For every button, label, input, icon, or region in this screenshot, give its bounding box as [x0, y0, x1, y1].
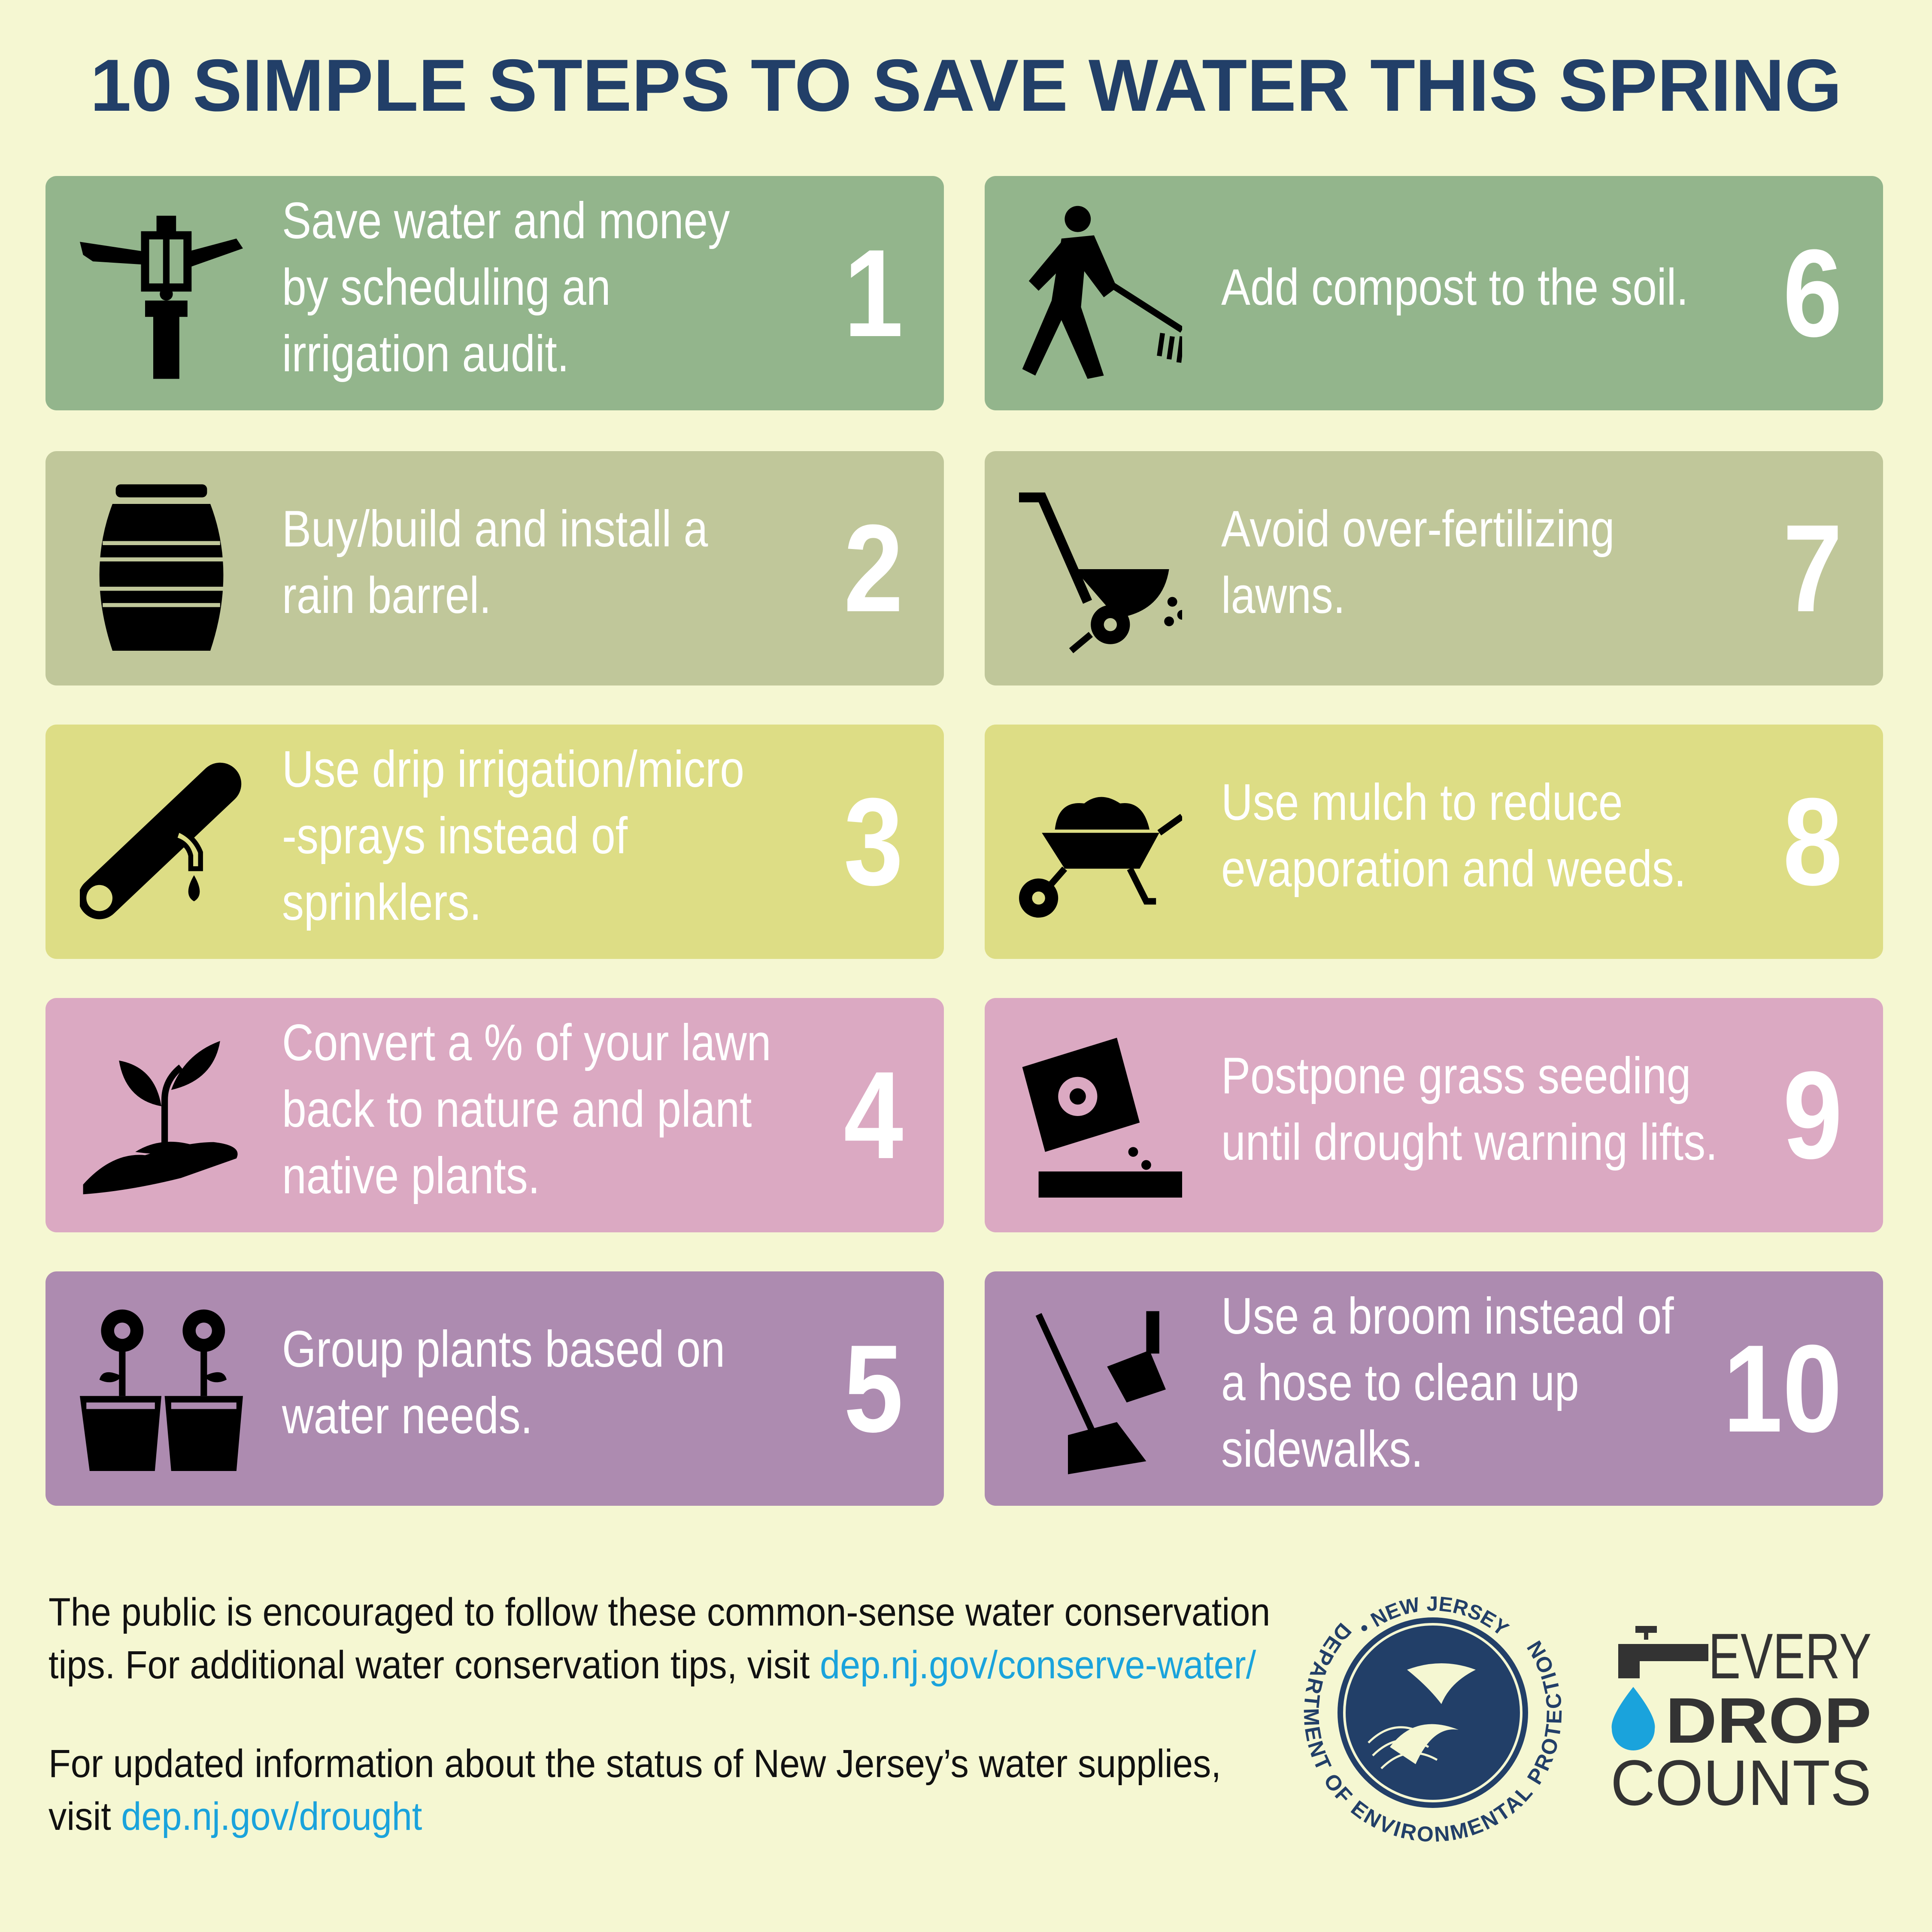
icon: hand with plant [80, 1024, 243, 1208]
text [282, 992, 866, 1226]
text [282, 170, 866, 404]
text: Add compost to the soil. [1221, 258, 1689, 316]
text [1221, 719, 1805, 953]
footer text 1: The public is encouraged to follow these common-sense water conservation [49, 1590, 1270, 1634]
number: 1 [843, 223, 903, 362]
text [282, 719, 866, 953]
text: irrigation audit. [282, 325, 569, 382]
text [1221, 1265, 1805, 1500]
footer text 1 [49, 1586, 1270, 1692]
number: 2 [843, 499, 903, 638]
text [1221, 992, 1805, 1226]
logo: NJ DEP seal [1283, 1562, 1583, 1863]
text: Group plants based on [282, 1320, 725, 1378]
logo: Every Drop Counts [1610, 1618, 1876, 1816]
panel: step 2 [45, 451, 944, 685]
text [282, 1265, 866, 1500]
text: Convert a % of your lawn [282, 1014, 771, 1071]
icon: potted flowers [80, 1297, 243, 1482]
icon: wheelbarrow [1019, 750, 1182, 935]
icon: drop [1612, 1687, 1655, 1750]
text: rain barrel. [282, 567, 491, 624]
icon: sprinkler [80, 202, 243, 386]
footer text 1: tips. For additional water conservation tips, visit dep.nj.gov/conserve-water/ [49, 1643, 1256, 1687]
number: 9 [1783, 1046, 1842, 1185]
panel: step 1 [45, 176, 944, 410]
text: back to nature and plant [282, 1080, 752, 1137]
icon: faucet [1618, 1626, 1708, 1678]
footer text 2: visit dep.nj.gov/drought [49, 1795, 422, 1838]
panel: step 4 [45, 998, 944, 1232]
logo: NJ DEP seal: DEPARTMENT OF ENVIRONMENTAL PROTECTION [1299, 1618, 1566, 1847]
icon: drip pipe [80, 750, 243, 935]
icon: rain barrel [80, 477, 243, 661]
panel: step 8 [985, 725, 1883, 959]
panel: step 10 [985, 1271, 1883, 1506]
panel: step 7 [985, 451, 1883, 685]
text: lawns. [1221, 567, 1345, 624]
icon: broom and dustpan [1019, 1297, 1182, 1482]
panel: step 3 [45, 725, 944, 959]
number: 4 [843, 1046, 903, 1185]
text: -sprays instead of [282, 807, 628, 864]
text: sidewalks. [1221, 1420, 1423, 1477]
number: 10 [1723, 1319, 1842, 1458]
icon: seed packet [1019, 1024, 1182, 1208]
panel: step 9 [985, 998, 1883, 1232]
text: Avoid over-fertilizing [1221, 500, 1615, 558]
icon: spreader [1019, 477, 1182, 661]
footer text 2: For updated information about the status of New Jersey’s water supplies, [49, 1742, 1221, 1786]
panel: step 5 [45, 1271, 944, 1506]
number: 5 [843, 1319, 903, 1458]
text: Buy/build and install a [282, 500, 708, 558]
number: 6 [1783, 223, 1842, 362]
icon: person raking [1019, 202, 1182, 386]
text: sprinklers. [282, 873, 482, 931]
title: 10 SIMPLE STEPS TO SAVE WATER THIS SPRING [90, 44, 1842, 127]
text: Postpone grass seeding [1221, 1047, 1691, 1104]
text [1221, 445, 1805, 679]
text: Save water and money [282, 191, 730, 249]
text: native plants. [282, 1147, 540, 1204]
text: Use a broom instead of [1221, 1287, 1674, 1344]
panel: step 6 [985, 176, 1883, 410]
text: water needs. [282, 1387, 533, 1444]
text: evaporation and weeds. [1221, 840, 1686, 898]
number: 3 [843, 772, 903, 911]
number: 8 [1783, 772, 1842, 911]
logo: Every Drop Counts: DROP [1665, 1684, 1871, 1756]
footer text 2 [49, 1738, 1221, 1843]
text: Use drip irrigation/micro [282, 740, 744, 798]
number: 7 [1783, 499, 1842, 638]
text: a hose to clean up [1221, 1354, 1579, 1411]
text: by scheduling an [282, 258, 611, 316]
text [282, 445, 866, 679]
text: Use mulch to reduce [1221, 773, 1623, 831]
text: until drought warning lifts. [1221, 1113, 1718, 1171]
